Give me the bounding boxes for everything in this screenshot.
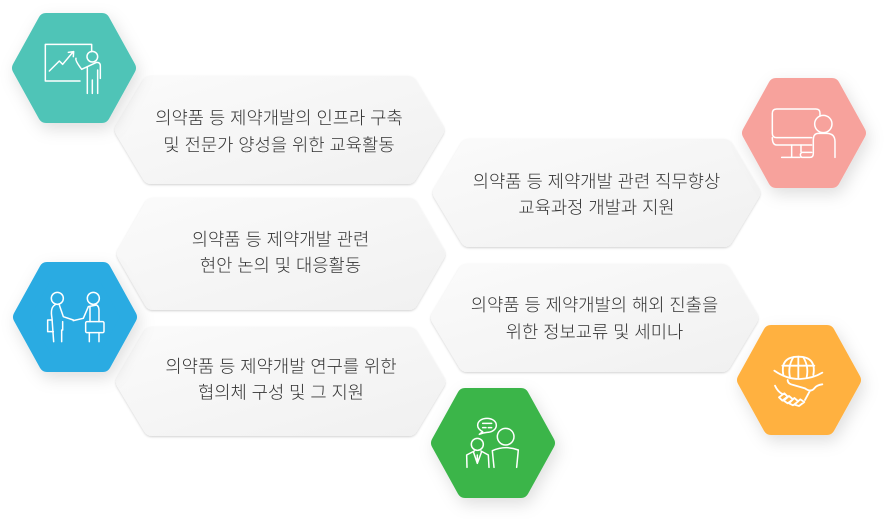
- panel: current issues and response: 현안 논의 및 대응활동: [200, 256, 361, 276]
- panel: current issues and response: [126, 207, 436, 301]
- hexagon: blue with handshake icon: [21, 270, 129, 364]
- panel: infrastructure and expert training: 및 전문가 양성을 위한 교육활동: [163, 135, 395, 155]
- panel: infrastructure and expert training: 의약품 등 제약개발의 인프라 구축: [155, 108, 403, 128]
- panel: overseas expansion: 의약품 등 제약개발의 해외 진출을: [471, 295, 718, 315]
- panel: research consortium: [125, 336, 436, 427]
- icon: two people talking: [467, 418, 518, 467]
- hexagon: teal with presenter icon: [20, 21, 128, 115]
- panel: job training curriculum: 교육과정 개발과 지원: [518, 198, 675, 218]
- panel: research consortium: 협의체 구성 및 그 지원: [198, 382, 364, 402]
- icon: presenter at chart: [45, 44, 100, 93]
- icon: globe over handshake: [774, 357, 822, 406]
- icon: person at monitor: [772, 109, 835, 157]
- hexagon: orange with global partnership icon: [745, 333, 853, 427]
- panel: research consortium: 의약품 등 제약개발 연구를 위한: [165, 356, 397, 376]
- panel: job training curriculum: [442, 148, 751, 238]
- panel: overseas expansion: 위한 정보교류 및 세미나: [506, 322, 683, 342]
- panel: overseas expansion: [440, 273, 749, 363]
- icon: two businesspeople shaking hands: [48, 292, 104, 342]
- panel: infrastructure and expert training: [124, 85, 435, 175]
- hexagon: pink with computer user icon: [750, 86, 858, 180]
- panel: current issues and response: 의약품 등 제약개발 관련: [192, 230, 369, 250]
- panel: job training curriculum: 의약품 등 제약개발 관련 직무향상: [473, 172, 720, 192]
- hexagon: green with discussion icon: [439, 396, 547, 490]
